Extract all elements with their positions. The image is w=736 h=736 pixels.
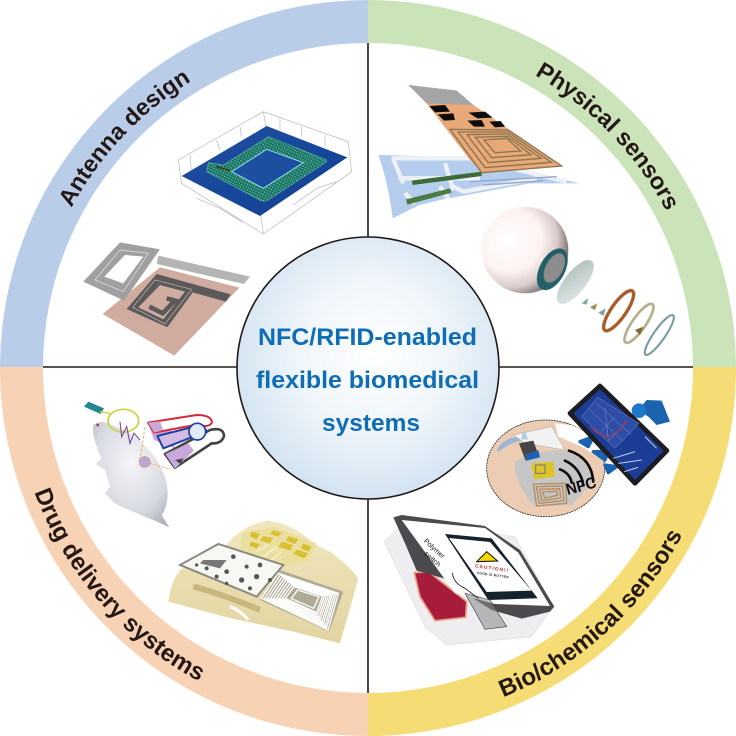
Polymer switch label: Polymer <box>422 538 446 561</box>
image: three-layer drug delivery strips <box>140 415 224 469</box>
ring segment: bio/chemical sensors <box>368 367 736 736</box>
image: mouse with implanted device <box>84 402 171 527</box>
NFC label: NFC <box>564 474 599 499</box>
image: layered antenna coils <box>83 242 250 356</box>
image: wound sensor with NFC readout on phone <box>487 386 670 517</box>
hub title: systems <box>322 410 420 437</box>
image: wearable implant on skin <box>168 521 358 643</box>
hub title: NFC/RFID-enabled <box>258 324 477 351</box>
FOOD IS ROTTEN text: FOOD IS ROTTEN <box>477 571 509 579</box>
image: eyeball with smart contact lens layers <box>482 207 678 358</box>
CAUTION text: CAUTION!! <box>475 563 509 573</box>
hub title <box>256 324 479 437</box>
ring segment: antenna design <box>0 0 368 367</box>
central hub <box>237 237 499 499</box>
hub title: flexible biomedical <box>256 367 479 394</box>
ring segment: physical sensors <box>368 0 736 367</box>
ring segment: drug delivery systems <box>0 367 368 736</box>
heading: Physical sensors: Physical sensors <box>536 62 676 210</box>
heading: Drug delivery systems: Drug delivery systems <box>34 488 203 680</box>
Polymer switch label: switch <box>422 550 442 569</box>
image: antenna simulation plot <box>178 112 352 234</box>
heading: Antenna design: Antenna design <box>60 72 190 208</box>
heading: Bio/chemical sensors: Bio/chemical sensors <box>498 531 681 697</box>
NFC waves <box>560 451 593 485</box>
image: food spoilage box with phone alert <box>384 515 554 645</box>
image: flexible strain sensor with coil <box>378 85 579 218</box>
